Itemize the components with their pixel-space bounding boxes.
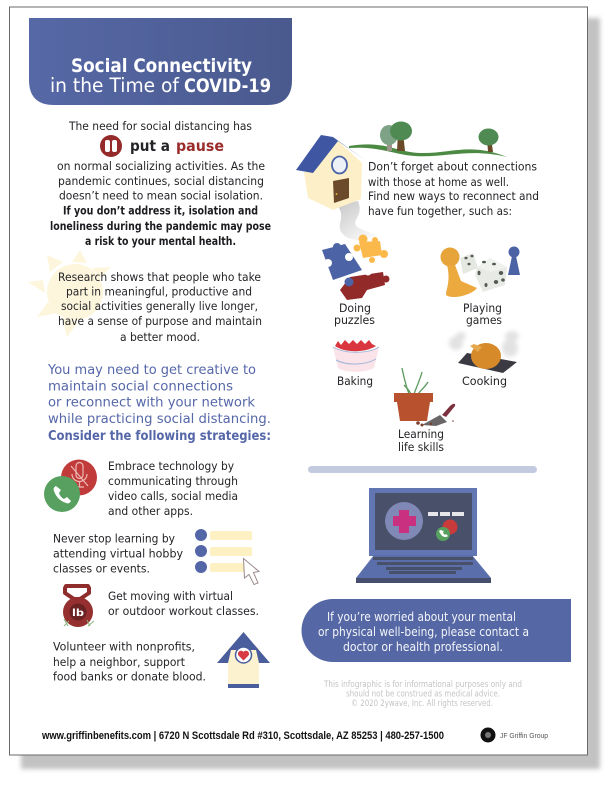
label: playing games: games: [466, 313, 502, 327]
label: learning life skills: [398, 427, 444, 454]
home connections text: with those at home as well.: [368, 175, 509, 189]
icon: laptop video call: [356, 488, 491, 583]
strategy text: volunteering: food banks or donate blood.: [53, 670, 206, 684]
intro text block: on normal socializing activities. As the: [57, 159, 265, 173]
footer logo: [480, 728, 548, 742]
intro text block: If you don’t address it, isolation and: [63, 204, 258, 218]
footer contact line: www.griffinbenefits.com | 6720 N Scottsdale Rd #310, Scottsdale, AZ 85253 | 480-257-1500: [41, 730, 444, 742]
research text: Research shows that people who take: [58, 270, 261, 284]
intro text block: doesn’t need to mean social isolation.: [59, 188, 263, 202]
strategy text: volunteering: help a neighbor, support: [53, 655, 185, 669]
icon: puzzles: [322, 234, 390, 300]
title banner: [29, 18, 292, 105]
strategy text: technology: video calls, social media: [108, 489, 238, 503]
icon: kettlebell: [63, 586, 94, 627]
intro text block: pause: [176, 137, 224, 155]
icon: phone and mic: [44, 460, 97, 512]
home connections text: Don’t forget about connections: [368, 160, 537, 174]
home connections text: have fun together, such as:: [368, 204, 512, 218]
icon: games: [440, 246, 520, 297]
icon: roast on grill: [449, 331, 519, 373]
label: playing games: Playing: [463, 301, 502, 315]
icon: kettlebell: lb: [72, 608, 84, 619]
strategy text: workouts: or outdoor workout classes.: [108, 604, 259, 618]
research text: part in meaningful, productive and: [66, 284, 252, 298]
icon: list and cursor: [195, 529, 259, 584]
title banner: COVID-19: [184, 75, 271, 97]
research text: have a sense of purpose and maintain: [58, 314, 262, 328]
intro text block: put a: [130, 137, 170, 155]
strategy text: workouts: Get moving with virtual: [108, 589, 233, 603]
strategies heading: or reconnect with your network: [48, 394, 255, 410]
strategies heading: while practicing social distancing.: [48, 411, 271, 427]
strategy text: learning: attending virtual hobby: [53, 546, 183, 560]
strategies heading: [47, 362, 271, 444]
path from house: [337, 201, 378, 240]
strategy text: technology: communicating through: [108, 474, 238, 488]
label: playing games: [463, 301, 502, 327]
title banner: Social Connectivity: [71, 55, 253, 77]
intro text block: loneliness during the pandemic may pose: [50, 219, 271, 233]
strategy text: learning: Never stop learning by: [53, 532, 175, 546]
label: cooking: Cooking: [462, 374, 507, 388]
scene: hill and trees: [349, 122, 507, 157]
callout: contact a doctor: doctor or health professional.: [343, 640, 503, 654]
strategy text: volunteering: Volunteer with nonprofits,: [53, 640, 195, 654]
icon: potted plant and trowel: [394, 368, 455, 426]
disclaimer: [323, 680, 522, 709]
strategy text: workouts: [108, 589, 259, 618]
icon: birdhouse with heart: [217, 632, 270, 688]
strategies heading: maintain social connections: [48, 378, 233, 394]
callout: contact a doctor: or physical well-being, please contact a: [318, 625, 529, 639]
label: doing puzzles: [334, 301, 375, 327]
strategy text: learning: classes or events.: [53, 562, 150, 576]
disclaimer: should not be construed as medical advice.: [346, 690, 500, 700]
research text: social activities generally live longer,: [61, 299, 258, 313]
intro text block: The need for social distancing has: [68, 119, 252, 133]
research text: a better mood.: [120, 330, 200, 344]
title banner: in the Time of: [50, 74, 180, 97]
icon: pause button: [100, 135, 122, 157]
callout: contact a doctor: If you’re worried about your mental: [327, 610, 516, 624]
strategy text: technology: [108, 459, 238, 518]
callout: contact a doctor: [302, 599, 571, 662]
intro text block: a risk to your mental health.: [85, 234, 236, 248]
strategy text: technology: and other apps.: [108, 504, 193, 518]
strategies heading: You may need to get creative to: [47, 362, 256, 378]
label: doing puzzles: Doing: [339, 301, 371, 315]
home connections text: Find new ways to reconnect and: [368, 189, 539, 203]
research text: [58, 270, 262, 344]
icon: cake: [333, 340, 379, 372]
intro text block: pandemic continues, social distancing: [58, 174, 264, 188]
disclaimer: This infographic is for informational purposes only and: [323, 680, 522, 690]
strategy text: technology: Embrace technology by: [108, 459, 234, 473]
intro text block: [50, 119, 271, 248]
label: learning life skills: Learning: [398, 427, 444, 441]
strategies heading: Consider the following strategies:: [48, 428, 271, 444]
label: baking: Baking: [337, 374, 373, 388]
label: doing puzzles: puzzles: [334, 313, 375, 327]
strategy text: learning: [53, 532, 183, 576]
label: learning life skills: life skills: [398, 440, 444, 454]
icon: house: [296, 135, 365, 210]
divider bar: [308, 466, 537, 473]
disclaimer: © 2020 2ywave, Inc. All rights reserved.: [351, 699, 493, 709]
home connections text: [368, 160, 539, 218]
footer logo: JF Griffin Group: [500, 733, 548, 740]
strategy text: volunteering: [53, 640, 206, 684]
icon: sun: [28, 250, 111, 337]
